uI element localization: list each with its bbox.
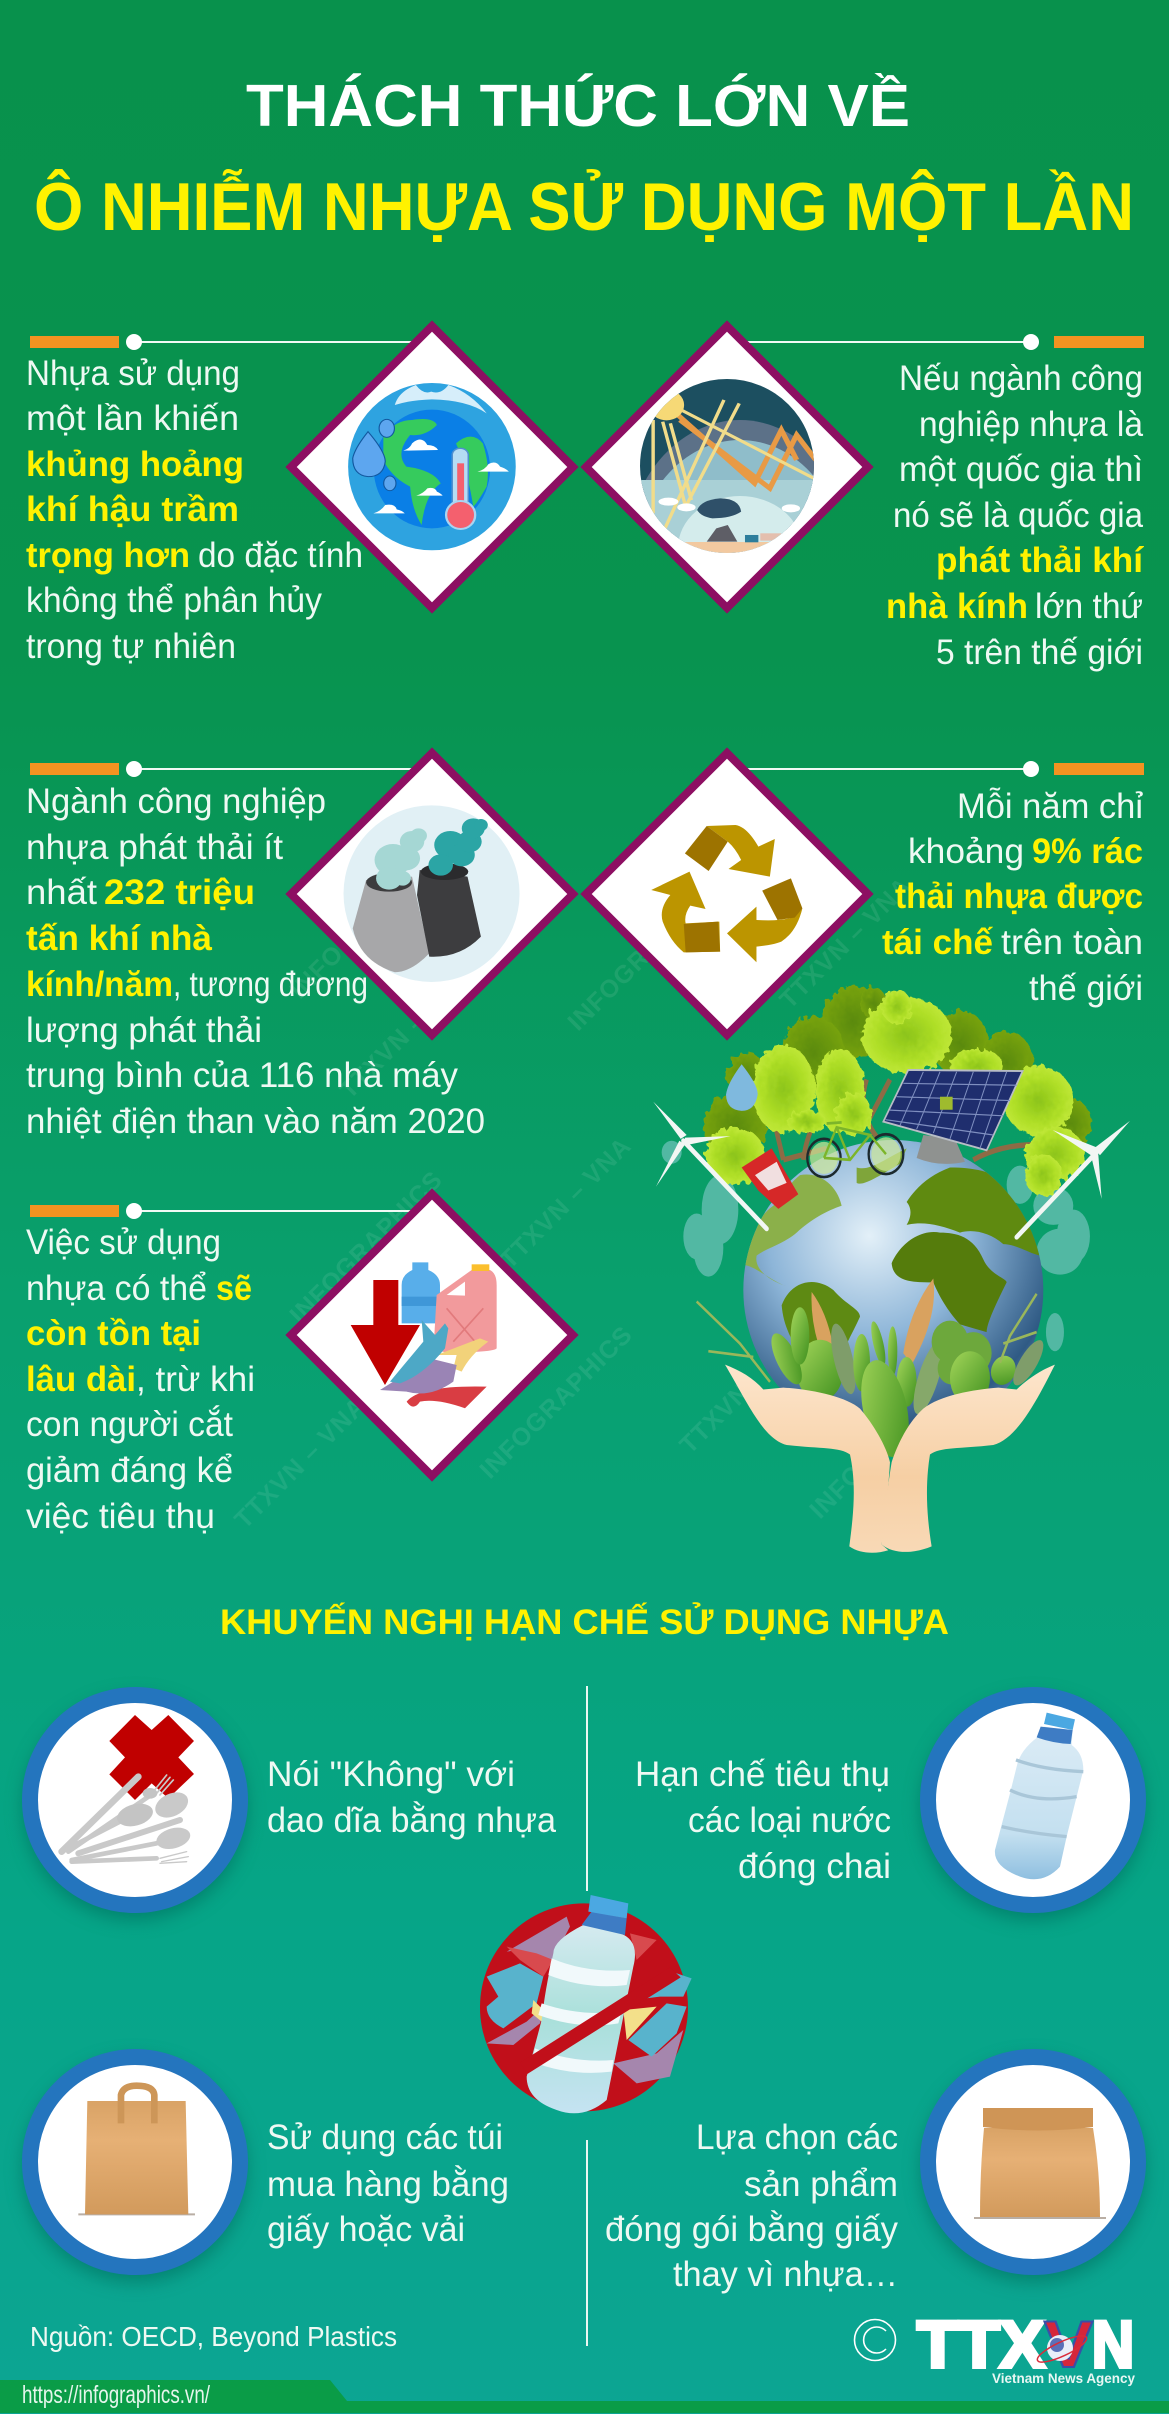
source: Nguồn: OECD, Beyond Plastics — [30, 2321, 397, 2352]
tree trunks — [773, 1080, 1037, 1160]
panel: climate crisis text: trong tự nhiên — [26, 627, 236, 666]
diamond: plastic waste icon — [291, 1194, 573, 1476]
panel: greenhouse nation text: nhà kính — [886, 587, 1028, 626]
connector: row 2 left — [30, 761, 418, 777]
panel: persistence text: , trừ khi — [136, 1360, 255, 1399]
text: bottled water: Hạn chế tiêu thụ — [635, 1755, 890, 1794]
icon: cutlery with red cross — [62, 1715, 194, 1863]
watermarks: TTXVN – VNA — [774, 872, 917, 1014]
panel: recycling text: thải nhựa được — [895, 877, 1143, 916]
diamond: greenhouse effect icon — [580, 320, 874, 614]
text: paper packaging — [605, 2118, 898, 2294]
panel: persistence text: sẽ — [216, 1269, 252, 1308]
watermarks: INFOGRAPHICS — [474, 1320, 638, 1484]
text: bottled water: đóng chai — [738, 1847, 891, 1886]
panel: greenhouse nation text: phát thải khí — [936, 541, 1144, 580]
diamond: recycling icon — [586, 753, 868, 1035]
watermarks: INFOGRAPHICS — [562, 872, 726, 1036]
panel: recycling text: thế giới — [1029, 969, 1143, 1008]
panel: climate crisis text: không thể phân hủy — [26, 581, 322, 620]
panel: recycling text: khoảng — [908, 832, 1024, 871]
panel: emissions text: lượng phát thải — [26, 1011, 262, 1050]
tree canopy front — [705, 990, 1085, 1196]
text: bottled water — [635, 1755, 891, 1886]
watermarks — [229, 840, 968, 1534]
connector: row 3 left — [30, 1203, 418, 1219]
panel: greenhouse nation text: Nếu ngành công — [899, 359, 1143, 398]
panel: emissions text: nhựa phát thải ít — [26, 828, 283, 867]
icon: greenhouse diagram — [640, 379, 814, 553]
connector: row 2 right — [746, 761, 1144, 777]
panel: recycling text: Mỗi năm chỉ — [957, 787, 1143, 826]
panel: greenhouse nation text: nghiệp nhựa là — [919, 405, 1144, 444]
icon: banned bottle and bags — [480, 1895, 692, 2113]
watermarks: TTXVN – VNA — [334, 962, 477, 1104]
copyright symbol — [854, 2320, 896, 2360]
icon: warming earth — [348, 383, 516, 550]
panel: climate crisis text: trọng hơn — [26, 536, 190, 575]
globe — [743, 1140, 1043, 1440]
text: paper bags: mua hàng bằng — [267, 2165, 509, 2204]
diamond: climate icon — [291, 326, 573, 608]
bicycle — [807, 1122, 903, 1177]
text: paper packaging: thay vì nhựa… — [673, 2255, 898, 2294]
illustration: earth in hands — [653, 986, 1130, 1553]
panel: greenhouse nation text: một quốc gia thì — [899, 450, 1143, 489]
heading: recommendations: KHUYẾN NGHỊ HẠN CHẾ SỬ DỤNG NHỰA — [220, 1602, 949, 1642]
icon: smokestacks — [344, 805, 520, 982]
panel: emissions text: nhiệt điện than vào năm 2020 — [26, 1102, 485, 1141]
panel: recycling text: trên toàn — [1001, 923, 1143, 962]
water drop — [726, 1064, 758, 1111]
text: paper packaging: đóng gói bằng giấy — [605, 2210, 898, 2249]
text: cutlery: dao dĩa bằng nhựa — [267, 1801, 557, 1840]
logo tagline: Vietnam News Agency — [992, 2370, 1135, 2386]
tree canopy back — [703, 986, 1092, 1156]
text: paper bags — [267, 2118, 509, 2249]
text: paper packaging: sản phẩm — [744, 2165, 898, 2204]
watermarks: INFOGRAPHICS — [804, 1360, 968, 1524]
wheat — [811, 1279, 934, 1365]
text: paper bags: giấy hoặc vải — [267, 2210, 465, 2249]
panel: climate crisis text: một lần khiến — [26, 399, 239, 438]
footer url: https://infographics.vn/ — [22, 2381, 210, 2409]
panel: limit bottled water — [635, 1695, 1145, 1920]
text: cutlery — [267, 1755, 557, 1840]
panel: greenhouse nation text: lớn thứ — [1035, 587, 1143, 626]
panel: paper packaging — [605, 2057, 1145, 2294]
panel: persistence text: con người cắt — [26, 1405, 233, 1444]
text: paper packaging: Lựa chọn các — [696, 2118, 898, 2157]
icon: falling plastic — [351, 1262, 497, 1408]
panel: greenhouse nation text: nó sẽ là quốc gia — [893, 496, 1144, 535]
panel: emissions text: trung bình của 116 nhà máy — [26, 1056, 458, 1095]
panel: recycling text: 9% rác — [1032, 832, 1143, 871]
logo: TTXVN: TTX — [917, 2307, 1045, 2381]
panel: emissions text: , tương đương — [173, 965, 368, 1004]
text: bottled water: các loại nước — [688, 1801, 891, 1840]
watermarks: TTXVN – VNA — [229, 1392, 372, 1534]
watermarks: INFOGRAPHICS — [284, 1165, 448, 1329]
panel: paper bags — [23, 2057, 509, 2282]
panel: persistence text: Việc sử dụng — [26, 1223, 221, 1262]
title — [34, 73, 1134, 245]
panel: climate crisis text — [26, 354, 363, 666]
panel: greenhouse nation text: 5 trên thế giới — [936, 633, 1143, 672]
panel: persistence text: việc tiêu thụ — [26, 1497, 215, 1536]
footer band — [0, 2380, 1169, 2413]
panel: recycling text — [882, 787, 1143, 1008]
logo: TTXVN — [917, 2307, 1135, 2386]
icon: shopping bag — [78, 2086, 195, 2214]
watermarks: TTXVN — [674, 1378, 756, 1459]
icon: water bottle — [995, 1713, 1083, 1879]
panel: climate crisis text: khí hậu trầm — [26, 490, 239, 529]
leaves — [757, 1307, 1049, 1463]
panel: persistence text: lâu dài — [26, 1360, 136, 1399]
watermarks: INFOGRAPHICS — [284, 840, 448, 1004]
connector: row 1 right — [746, 334, 1144, 350]
text: cutlery: Nói "Không" với — [267, 1755, 515, 1794]
panel: persistence text: nhựa có thể — [26, 1269, 207, 1308]
teal smoke clouds — [662, 1141, 1090, 1351]
diamond: power plant icon — [291, 753, 573, 1035]
panel: emissions text: kính/năm — [26, 965, 173, 1004]
panel: persistence text: còn tồn tại — [26, 1314, 201, 1353]
watermarks: TTXVN – VNA — [494, 1132, 637, 1274]
continents — [745, 1148, 1042, 1363]
panel: emissions text: Ngành công nghiệp — [26, 782, 326, 821]
right hand — [882, 1365, 1055, 1552]
panel: climate crisis text: Nhựa sử dụng — [26, 354, 240, 393]
panel: no plastic cutlery — [23, 1695, 557, 1920]
left hand — [725, 1365, 890, 1553]
logo: TTXVN: V — [1044, 2307, 1093, 2381]
panel: emissions text: tấn khí nhà — [26, 919, 213, 958]
panel: emissions text: nhất — [26, 873, 97, 912]
wind turbines — [653, 1102, 1130, 1237]
solar panel — [917, 1135, 965, 1164]
panel: greenhouse nation text — [886, 359, 1144, 672]
panel: persistence text: giảm đáng kể — [26, 1451, 233, 1490]
panel: climate crisis text: khủng hoảng — [26, 445, 244, 484]
icon: paper package — [974, 2108, 1106, 2218]
connector: row 1 left — [30, 334, 418, 350]
recycling bin — [742, 1148, 798, 1209]
panel: climate crisis text: do đặc tính — [198, 536, 363, 575]
panel: emissions text: 232 triệu — [104, 873, 255, 912]
panel: persistence text — [26, 1223, 255, 1536]
title: THÁCH THỨC LỚN VỀ — [246, 73, 910, 139]
sprigs — [697, 1294, 1037, 1382]
icon: recycle arrows — [651, 825, 802, 962]
panel: recycling text: tái chế — [882, 923, 994, 962]
panel: emissions text — [26, 782, 485, 1141]
logo: TTXVN: N — [1092, 2307, 1134, 2381]
text: paper bags: Sử dụng các túi — [267, 2118, 503, 2157]
